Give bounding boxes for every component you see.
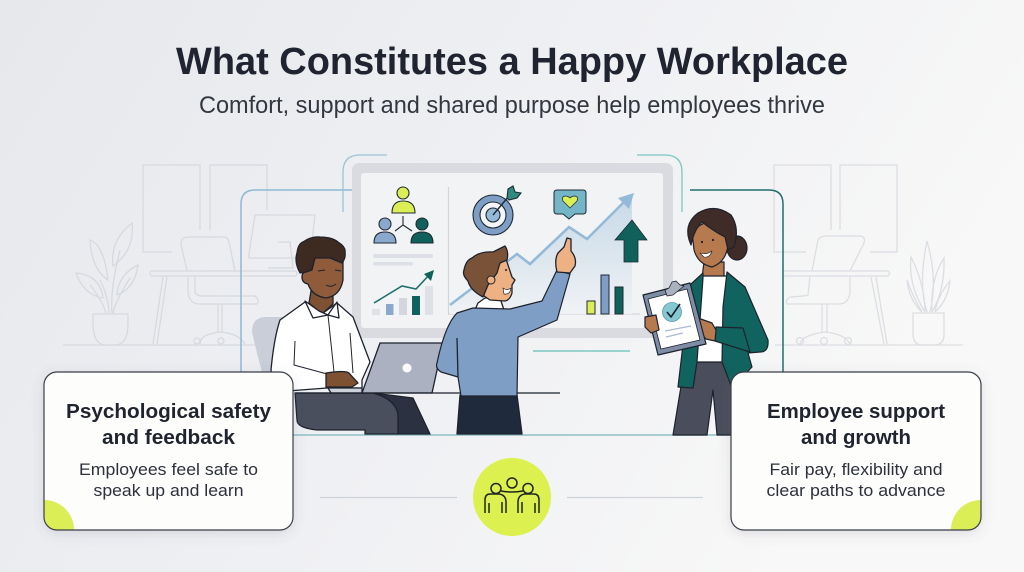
right teal scene frame: [690, 190, 783, 372]
collar: [305, 301, 339, 318]
person: woman with clipboard: [643, 208, 768, 435]
card heading: Employee support: [767, 400, 945, 423]
subtitle: Comfort, support and shared purpose help employees thrive: [199, 92, 825, 119]
icon: heart speech bubble: [554, 190, 586, 219]
blazer right panel and sleeve: [722, 272, 768, 388]
card heading: and feedback: [102, 426, 236, 449]
card: psychological safety and feedback: [40, 371, 296, 536]
trousers: [457, 395, 522, 434]
head: [482, 256, 515, 301]
card heading: and growth: [801, 426, 911, 449]
smile: [700, 251, 712, 257]
icon: target with dart: [473, 186, 521, 235]
card background: [44, 372, 293, 530]
collar: [474, 298, 504, 312]
board top-right bracket: [637, 155, 682, 212]
icon: up arrow: [615, 220, 647, 262]
blazer left panel: [678, 273, 703, 388]
shirt: [271, 302, 370, 392]
icon: team in yellow circle: [473, 458, 551, 536]
far hand: [698, 318, 716, 341]
background office line art: left: [63, 165, 315, 345]
desk edge: [295, 392, 560, 394]
left eye: [701, 241, 703, 243]
left blue scene frame: [241, 190, 352, 435]
board top-left bracket: [343, 155, 387, 212]
card body: Fair pay, flexibility and: [770, 460, 942, 479]
card corner accent: [951, 500, 980, 530]
hand: [326, 372, 358, 387]
card: employee support and growth: [728, 371, 984, 536]
head: [692, 221, 728, 267]
right eye: [712, 239, 714, 241]
title: What Constitutes a Happy Workplace: [176, 41, 848, 83]
shirt details: [294, 315, 353, 374]
presentation board: [343, 155, 682, 351]
hand pointing: [556, 238, 576, 273]
clipboard: [643, 281, 706, 355]
card background: [731, 372, 981, 530]
white top: [696, 276, 729, 362]
sweater: [436, 270, 570, 396]
background office line art: right: [774, 165, 963, 345]
line under board: [533, 350, 630, 352]
board screen: [361, 173, 663, 328]
card body: clear paths to advance: [766, 481, 946, 500]
card corner accent: [44, 500, 74, 530]
icon: team hierarchy: [374, 187, 433, 243]
card body: speak up and learn: [94, 481, 244, 500]
hair: [464, 246, 508, 297]
hair bun: [727, 236, 747, 260]
main growth chart: [450, 193, 634, 314]
ear: [487, 276, 495, 284]
smile: [503, 288, 511, 294]
facial features: [318, 270, 341, 286]
neck: [309, 285, 333, 314]
card heading: Psychological safety: [66, 400, 272, 423]
neck: [702, 262, 724, 284]
near trouser leg: [295, 393, 398, 434]
hair: [296, 237, 345, 273]
head: [302, 252, 343, 298]
near hand: [645, 315, 659, 333]
laptop: [362, 343, 443, 393]
card border: [44, 372, 293, 530]
card border: [731, 372, 981, 530]
card body: Employees feel safe to: [79, 460, 258, 479]
trousers: [673, 362, 745, 435]
chair behind seated man: [252, 317, 285, 372]
footer divider right: [567, 496, 703, 498]
text placeholder lines: [373, 254, 433, 266]
board frame: [352, 163, 673, 338]
hair: [688, 208, 736, 250]
eye: [505, 269, 507, 271]
board divider and axis: [448, 187, 640, 314]
person: man pointing at chart: [436, 238, 576, 434]
person: seated man with laptop: [271, 237, 443, 434]
sleeve: [715, 327, 750, 352]
footer divider left: [320, 496, 457, 498]
mini bar chart: [372, 270, 434, 315]
far trouser leg: [373, 393, 430, 434]
scene floor line: [293, 434, 732, 436]
